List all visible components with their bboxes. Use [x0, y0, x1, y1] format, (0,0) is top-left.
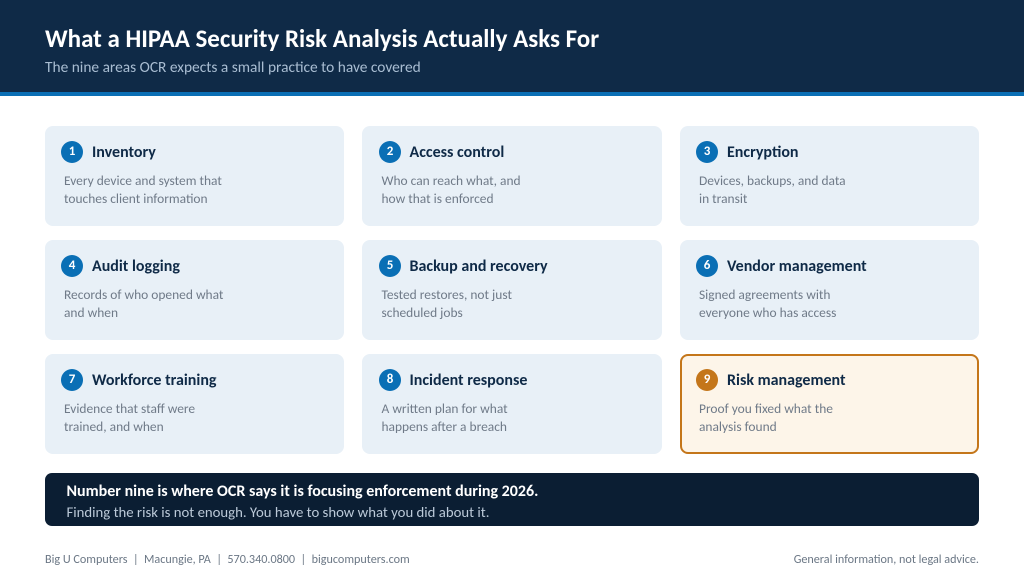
panel: 5 backup and recovery: Tested restores, not just	[382, 286, 512, 303]
panel: 7 workforce training: Workforce training	[92, 371, 216, 390]
panel: 2 access control: how that is enforced	[382, 190, 494, 207]
panel: 1 inventory: Inventory	[92, 143, 156, 162]
panel: 2 access control: 2	[387, 144, 393, 159]
panel: 3 encryption: Devices, backups, and data	[699, 172, 846, 189]
panel: 8 incident response: Incident response	[410, 371, 527, 390]
panel: 2 access control: Access control	[410, 143, 504, 162]
panel: 3 encryption: Encryption	[727, 143, 798, 162]
panel: 6 vendor management: Signed agreements with	[699, 286, 830, 303]
panel: 6 vendor management: everyone who has access	[699, 304, 836, 321]
panel: 8 incident response: happens after a breach	[382, 418, 507, 435]
panel: 1 inventory: Every device and system that	[64, 172, 222, 189]
panel: 3 encryption: in transit	[699, 190, 747, 207]
footer disclaimer: General information, not legal advice.	[794, 552, 979, 567]
panel: 5 backup and recovery: 5	[387, 258, 393, 273]
panel: 6 vendor management: Vendor management	[727, 257, 867, 276]
panel: 3 encryption	[680, 126, 979, 226]
panel: 3 encryption: 3	[704, 144, 710, 159]
panel: 2 access control	[362, 126, 662, 226]
panel: 1 inventory	[45, 126, 344, 226]
callout band	[45, 473, 979, 526]
footer contact line: Big U Computers | Macungie, PA | 570.340.0800 | bigucomputers.com	[45, 552, 410, 567]
panel: 4 audit logging: Audit logging	[92, 257, 180, 276]
panel: 9 risk management highlighted	[680, 354, 979, 454]
panel: 8 incident response: 8	[387, 372, 393, 387]
panel: 6 vendor management: 6	[704, 258, 710, 273]
panel: 4 audit logging	[45, 240, 344, 340]
callout headline: Number nine is where OCR says it is focusing enforcement during 2026.	[66, 482, 538, 501]
panel: 5 backup and recovery	[362, 240, 662, 340]
subtitle: The nine areas OCR expects a small practice to have covered	[45, 58, 421, 77]
panel: 7 workforce training: Evidence that staff were	[64, 400, 195, 417]
panel: 2 access control: Who can reach what, and	[382, 172, 521, 189]
panel: 9 risk management highlighted: Risk management	[727, 371, 846, 390]
panel: 5 backup and recovery: Backup and recovery	[410, 257, 548, 276]
panel: 1 inventory: 1	[69, 144, 75, 159]
panel: 4 audit logging: and when	[64, 304, 118, 321]
title: What a HIPAA Security Risk Analysis Actually Asks For	[45, 23, 599, 54]
panel: 5 backup and recovery: scheduled jobs	[382, 304, 463, 321]
panel: 9 risk management highlighted: Proof you fixed what the	[699, 400, 833, 417]
panel: 4 audit logging: Records of who opened what	[64, 286, 223, 303]
panel: 9 risk management highlighted: 9	[704, 372, 710, 387]
header band	[0, 0, 1024, 96]
panel: 4 audit logging: 4	[69, 258, 75, 273]
panel: 1 inventory: touches client information	[64, 190, 208, 207]
panel: 6 vendor management	[680, 240, 979, 340]
panel: 8 incident response: A written plan for what	[382, 400, 508, 417]
panel: 8 incident response	[362, 354, 662, 454]
panel: 7 workforce training	[45, 354, 344, 454]
panel: 7 workforce training: 7	[69, 372, 75, 387]
panel: 7 workforce training: trained, and when	[64, 418, 164, 435]
panel: 9 risk management highlighted: analysis found	[699, 418, 777, 435]
callout body: Finding the risk is not enough. You have to show what you did about it.	[66, 503, 489, 521]
